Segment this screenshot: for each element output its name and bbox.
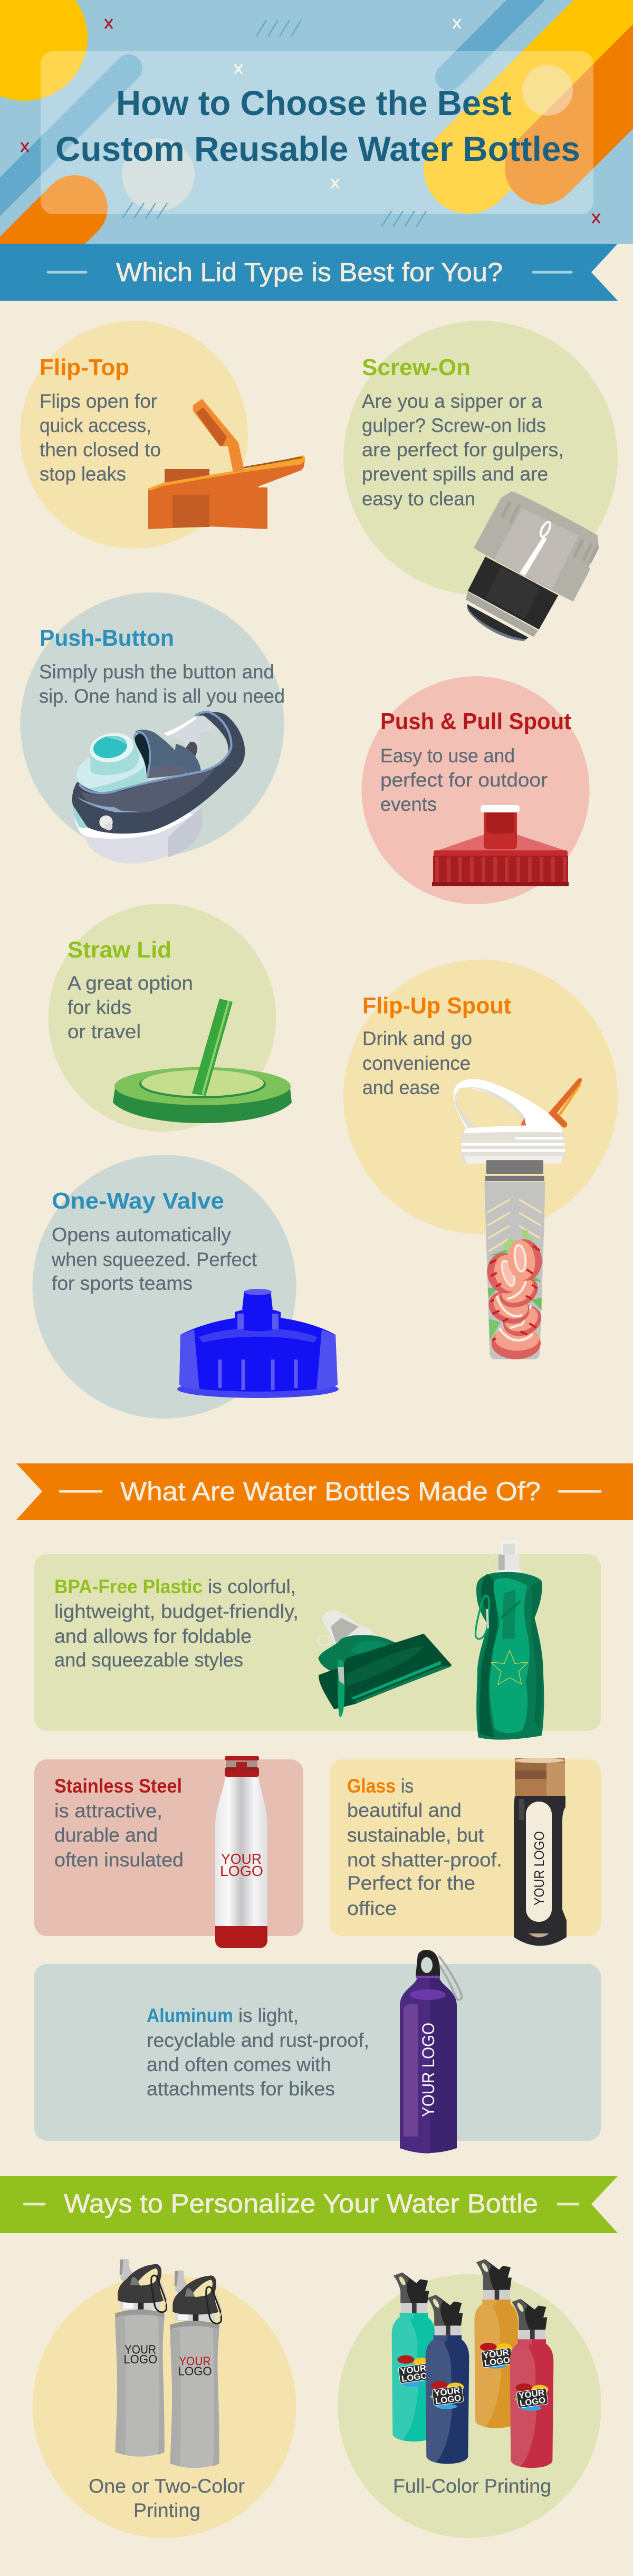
- bottle logo: LOGO: [220, 1863, 263, 1879]
- description: and allows for foldable: [54, 1625, 252, 1647]
- description: Glass: [347, 1775, 396, 1797]
- description: or travel: [68, 1021, 141, 1042]
- bottle logo: YOUR: [221, 1851, 262, 1867]
- description: Perfect for the: [347, 1872, 475, 1894]
- description: for sports teams: [52, 1272, 193, 1294]
- header banner: [0, 0, 633, 244]
- icon: push-button lid: [72, 712, 245, 864]
- description: Flips open for: [40, 390, 157, 412]
- logo one-color: LOGO: [123, 2352, 157, 2366]
- label: [89, 2475, 245, 2521]
- icon: folded water bag: [318, 1610, 452, 1717]
- title panel: [41, 51, 593, 214]
- description: and often comes with: [147, 2054, 331, 2075]
- icon: flip-top lid: [148, 399, 305, 529]
- description: [362, 390, 564, 510]
- description: [51, 1224, 257, 1294]
- description: [54, 1576, 299, 1671]
- bottle logo: YOUR LOGO: [419, 2023, 438, 2117]
- logo two-color: YOUR: [179, 2354, 210, 2368]
- description: [347, 1775, 502, 1919]
- description: convenience: [362, 1052, 471, 1074]
- icon: one-way valve cap: [177, 1289, 339, 1398]
- label: One or Two-Color: [89, 2475, 245, 2497]
- description: is attractive,: [54, 1800, 162, 1822]
- panel: BPA-Free Plastic: [34, 1540, 601, 1740]
- pale circles: [122, 65, 573, 211]
- teal bottle logo: LOGO: [401, 2370, 428, 2384]
- panel: Full-Color Printing: [338, 2259, 601, 2538]
- cross marks: [21, 19, 600, 223]
- heading: One-Way Valve: [52, 1188, 224, 1214]
- description: is: [401, 1775, 414, 1797]
- description: gulper? Screw-on lids: [362, 415, 546, 436]
- description: sustainable, but: [347, 1824, 484, 1846]
- description: then closed to: [40, 439, 161, 461]
- icon: aluminum bottle: [400, 1950, 462, 2153]
- panel: Stainless Steel: [34, 1756, 303, 1948]
- description: for kids: [68, 997, 131, 1018]
- panel: Aluminum: [34, 1950, 601, 2153]
- bottle logo: YOUR LOGO: [531, 1831, 547, 1905]
- heading: Flip-Up Spout: [362, 993, 511, 1019]
- panel: One or Two-Color Printing: [33, 2259, 296, 2538]
- description: office: [347, 1898, 397, 1919]
- panel: Screw-On: [343, 321, 618, 641]
- description: A great option: [68, 972, 193, 994]
- panel: Flip-Up Spout: [343, 960, 618, 1359]
- icon: screw-on cap: [466, 492, 599, 641]
- description: [147, 2005, 369, 2100]
- icon: infuser bottle: [454, 1078, 582, 1359]
- description: lightweight, budget-friendly,: [54, 1601, 299, 1622]
- description: [54, 1775, 184, 1871]
- icon: glass bottle: [514, 1758, 567, 1946]
- yellow bottle logo: [480, 2343, 513, 2369]
- description: Aluminum: [147, 2005, 233, 2026]
- icon: four colored bottles: [392, 2259, 553, 2468]
- icon: standing water bag: [476, 1540, 544, 1740]
- ribbon: personalize: [0, 2176, 618, 2233]
- title: Custom Reusable Water Bottles: [55, 129, 580, 168]
- icon: two gray bottles: [115, 2259, 222, 2468]
- description: [380, 745, 548, 815]
- description: beautiful and: [347, 1799, 462, 1821]
- red bottle logo: YOUR: [518, 2387, 545, 2401]
- logo two-color: [178, 2354, 212, 2378]
- title: [55, 83, 580, 168]
- description: BPA-Free Plastic: [54, 1576, 203, 1597]
- panel: Straw Lid: [49, 904, 292, 1132]
- description: [68, 972, 193, 1042]
- heading: Push & Pull Spout: [380, 708, 571, 734]
- description: not shatter-proof.: [347, 1849, 502, 1871]
- ribbon: lid types: [0, 244, 618, 301]
- ribbon: materials: [16, 1463, 633, 1520]
- logo two-color: LOGO: [178, 2364, 212, 2378]
- label: Full-Color Printing: [393, 2475, 551, 2497]
- description: attachments for bikes: [147, 2078, 335, 2100]
- description: recyclable and rust-proof,: [147, 2029, 369, 2051]
- description: [39, 661, 285, 707]
- panel: One-Way Valve: [33, 1155, 339, 1419]
- heading: Screw-On: [362, 355, 471, 380]
- ribbon: personalize: Ways to Personalize Your Water Bottle: [64, 2189, 538, 2218]
- heading: Flip-Top: [40, 355, 129, 380]
- description: and ease: [362, 1077, 440, 1098]
- panel: Push & Pull Spout: [362, 676, 590, 904]
- description: stop leaks: [40, 463, 126, 485]
- description: and squeezable styles: [54, 1649, 243, 1671]
- description: Easy to use and: [380, 745, 515, 767]
- description: easy to clean: [362, 488, 475, 510]
- logo one-color: YOUR: [124, 2343, 156, 2357]
- panel: Push-Button: [20, 592, 285, 864]
- description: durable and: [54, 1824, 158, 1846]
- navy bottle logo: LOGO: [435, 2393, 462, 2406]
- description: Stainless Steel: [54, 1775, 182, 1797]
- label: Printing: [133, 2500, 200, 2521]
- logo one-color: [123, 2343, 157, 2366]
- title: How to Choose the Best: [116, 83, 512, 122]
- description: when squeezed. Perfect: [51, 1249, 257, 1270]
- description: are perfect for gulpers,: [362, 439, 564, 461]
- yellow bottle logo: YOUR: [483, 2347, 510, 2361]
- description: sip. One hand is all you need: [39, 685, 285, 707]
- icon: stainless bottle: [215, 1756, 267, 1948]
- description: is colorful,: [208, 1576, 296, 1597]
- ribbon: materials: What Are Water Bottles Made Of?: [120, 1477, 541, 1506]
- bottle logo: [220, 1851, 263, 1879]
- description: is light,: [238, 2005, 299, 2026]
- panel: Flip-Top: [20, 321, 305, 549]
- description: quick access,: [40, 415, 151, 436]
- description: Drink and go: [362, 1028, 472, 1049]
- navy bottle logo: [430, 2381, 464, 2409]
- icon: straw lid: [113, 999, 292, 1123]
- header background shapes: [0, 0, 633, 244]
- icon: push and pull lid: [432, 805, 569, 886]
- description: prevent spills and are: [362, 463, 548, 485]
- heading: Push-Button: [40, 625, 174, 651]
- teal bottle logo: [397, 2355, 430, 2387]
- slash marks: [122, 20, 426, 227]
- red bottle logo: [515, 2383, 548, 2411]
- description: Opens automatically: [52, 1224, 231, 1246]
- description: often insulated: [54, 1849, 184, 1871]
- description: Simply push the button and: [39, 661, 274, 683]
- panel: Glass: [330, 1758, 601, 1946]
- description: Are you a sipper or a: [362, 390, 542, 412]
- navy bottle logo: YOUR: [434, 2385, 461, 2399]
- description: [40, 390, 161, 485]
- description: events: [380, 793, 437, 815]
- teal bottle logo: YOUR: [400, 2363, 427, 2376]
- description: [362, 1028, 472, 1098]
- heading: Straw Lid: [68, 937, 171, 963]
- red bottle logo: LOGO: [519, 2395, 546, 2409]
- description: perfect for outdoor: [380, 769, 548, 791]
- yellow bottle logo: LOGO: [484, 2355, 511, 2368]
- ribbon: lid types: Which Lid Type is Best for You?: [116, 257, 503, 287]
